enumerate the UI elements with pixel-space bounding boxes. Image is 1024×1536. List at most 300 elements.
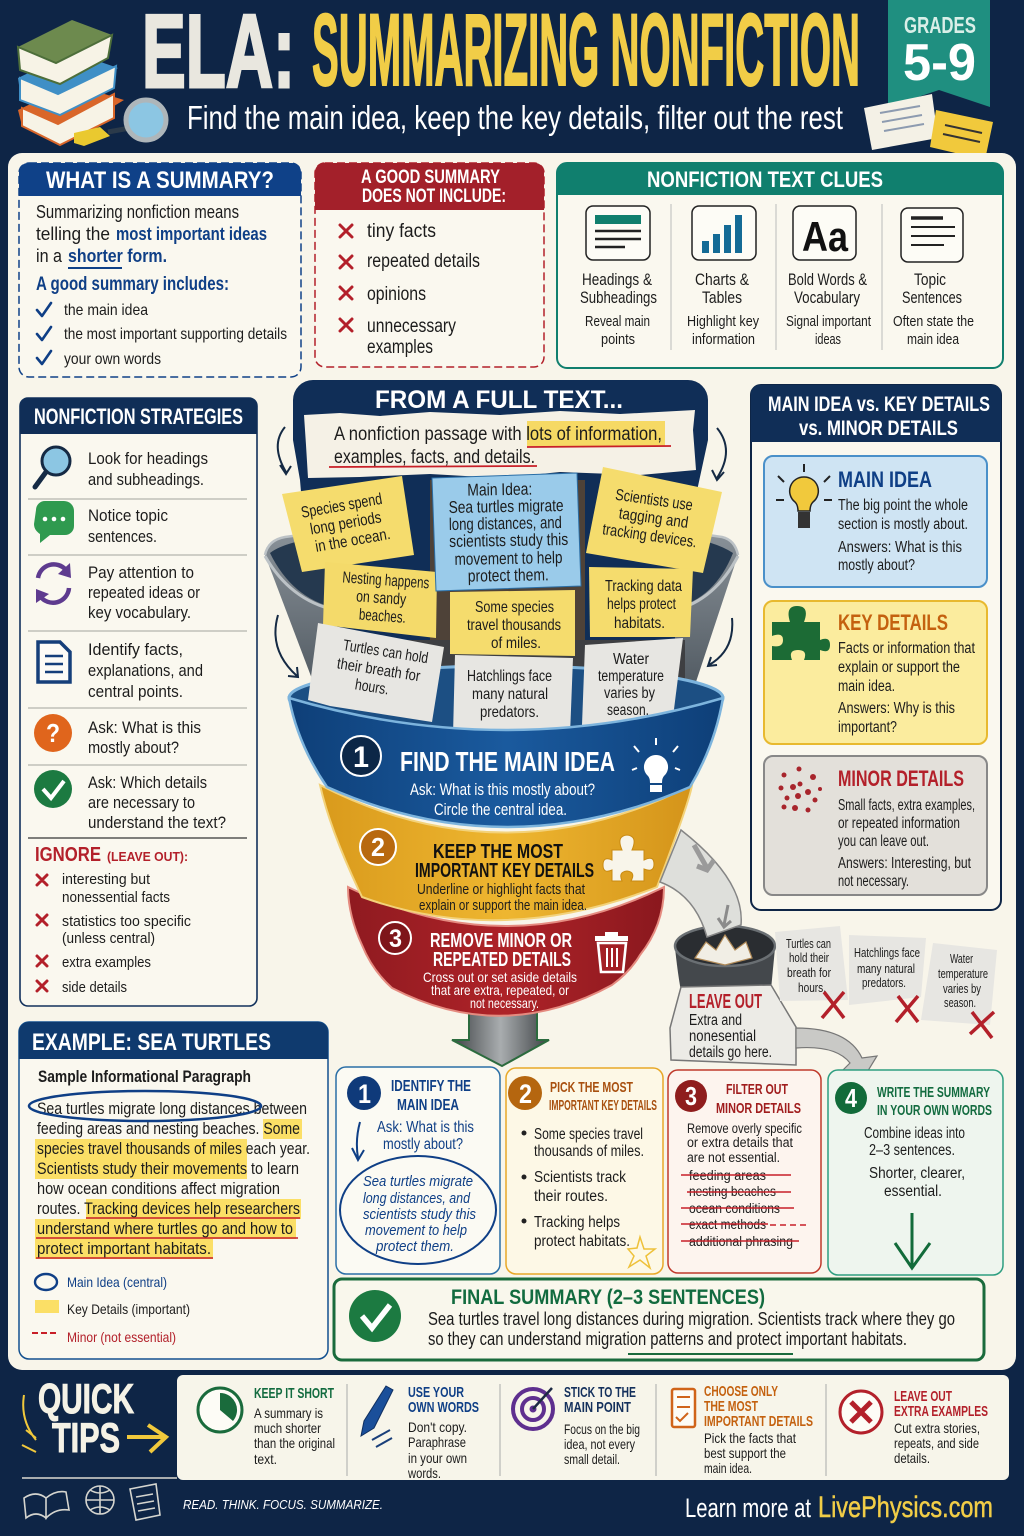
strategy: repeated ideas: [88, 563, 200, 622]
card: key details: explain or support the: [838, 659, 960, 676]
step 1 title: FIND THE MAIN IDEA: [400, 746, 615, 777]
ignore list: nonessential facts: [62, 889, 170, 906]
discarded note: water: temperature: [938, 966, 988, 981]
strategy: topic sentences: Notice topic: [88, 506, 168, 525]
paragraph text: Scientists study their movements to learn: [37, 1160, 299, 1178]
clue: topic sentences: main idea: [907, 331, 960, 348]
sticky note: scientists: tracking devices.: [601, 521, 698, 551]
legend: [32, 1274, 190, 1345]
clue: charts: [687, 270, 759, 348]
list of exclusions: examples: [367, 337, 433, 358]
tip: keep it short: KEEP IT SHORT: [254, 1385, 334, 1402]
step 3 title: REMOVE MINOR OR: [430, 930, 572, 952]
sticky note: main idea (blue): Sea turtles migrate: [448, 496, 564, 517]
card: key details: main idea.: [838, 678, 895, 695]
ignore heading: IGNORE: [35, 844, 101, 866]
gray note: hatchlings: [453, 655, 573, 735]
sticky note: some species: [450, 590, 575, 656]
icon: Aa: Aa: [802, 213, 849, 260]
definition text: shorter form.: [68, 246, 167, 266]
step card 1: identify the main idea: Ask: What is this: [377, 1119, 474, 1136]
discarded note: water: varies by: [943, 981, 981, 996]
definition text: in a: [36, 246, 63, 266]
step 1 description: Ask: What is this mostly about?: [410, 781, 595, 799]
step card 1: identify the main idea: Sea turtles migrate: [363, 1173, 473, 1190]
ignore heading: [35, 844, 188, 866]
clue: bold words: Bold Words &: [788, 270, 867, 289]
step card 2: pick key details: IMPORTANT KEY DETAILS: [549, 1097, 657, 1114]
icon: light bulb: [632, 738, 680, 792]
sticky note: some species: Some species: [475, 599, 554, 616]
discarded note: hatchlings: Hatchlings face: [854, 945, 920, 960]
main idea circle: [29, 1091, 261, 1121]
strategy: necessary details: [88, 773, 226, 832]
step card 3: filter out minor details: additional phrasing: [689, 1233, 793, 1249]
clue: headings: Subheadings: [580, 288, 657, 307]
strategy: repeated ideas: repeated ideas or: [88, 583, 200, 602]
tip: use your own words: Don't copy.: [408, 1419, 467, 1435]
clue: bold words: ideas: [815, 331, 841, 348]
tip: use your own words: words.: [407, 1465, 441, 1481]
card: main idea: section is mostly about.: [838, 516, 968, 533]
step card 1: identify the main idea: protect them.: [375, 1238, 454, 1255]
paragraph highlights: [35, 1119, 302, 1259]
sticky note: main idea (blue): movement to help: [454, 548, 563, 569]
step card 1: identify the main idea: mostly about?: [383, 1136, 463, 1153]
discarded note: hatchlings: predators.: [862, 975, 906, 990]
clue: charts: Tables: [702, 288, 742, 307]
sticky note: species spend: long periods: [309, 509, 383, 538]
step card 2: pick key details: thousands of miles.: [534, 1143, 644, 1160]
gray note: water temperature: [582, 638, 683, 725]
step 1 description: [410, 781, 595, 819]
icon: trash can: [595, 932, 628, 972]
tip: choose only important details: CHOOSE ONLY: [704, 1383, 778, 1400]
tip: use your own words: Paraphrase: [408, 1434, 466, 1450]
paragraph text: how ocean conditions affect migration: [37, 1180, 280, 1198]
funnel band 1: find the main idea: [289, 698, 723, 827]
card: minor details: Answers: Interesting, but: [838, 855, 972, 872]
footer icons: [24, 1484, 160, 1520]
list of exclusions: repeated details: [367, 251, 480, 272]
legend: Main Idea (central): [67, 1274, 167, 1290]
sticky note: tracking data: Tracking data: [605, 578, 682, 595]
gray note: turtles: [308, 623, 444, 722]
quick tips strip: [177, 1375, 1009, 1481]
final summary box: so they can understand migration patterns and protect important habitats.: [428, 1329, 907, 1349]
definition text: most important ideas: [116, 224, 267, 244]
strategy: repeated ideas: Pay attention to: [88, 563, 194, 582]
step card 2: pick key details: their routes.: [534, 1188, 608, 1205]
clue: topic sentences: Often state the: [893, 313, 974, 330]
step card 4: write the summary: Shorter, clearer,: [869, 1165, 965, 1182]
sticky note: scientists: Scientists use: [614, 487, 694, 514]
leave out label: LEAVE OUT: [689, 991, 762, 1013]
step card 3: filter out minor details: exact methods: [689, 1216, 766, 1232]
tip: leave out extra examples: LEAVE OUT: [894, 1388, 952, 1405]
learn more link text: Learn more at: [685, 1493, 811, 1523]
strategy: facts: explanations, and: [88, 661, 203, 680]
ignore heading: (LEAVE OUT):: [107, 849, 188, 864]
tip: choose only important details: best support the: [704, 1445, 786, 1461]
step card 1: identify the main idea: scientists study this: [363, 1206, 476, 1223]
sticky note: nesting: [323, 562, 437, 638]
step card 4: write the summary: 2–3 sentences.: [869, 1142, 955, 1159]
step 2 title: [415, 841, 594, 882]
step card 2: pick key details: protect habitats.: [534, 1233, 630, 1250]
arrows: falling notes: [275, 427, 732, 677]
ignore list: side details: [62, 979, 127, 996]
paragraph text: Sea turtles migrate long distances between: [37, 1100, 307, 1118]
step 3 title: REPEATED DETAILS: [433, 949, 571, 971]
sticky note: tracking data: habitats.: [614, 615, 665, 632]
step card 3: filter out minor details: [668, 1070, 821, 1273]
torn paper passage: examples, facts, and details.: [334, 447, 535, 468]
step card 2: pick key details: Scientists track: [534, 1169, 626, 1186]
discarded note: water: Water: [950, 951, 973, 966]
step card 4: write the summary: 4: [845, 1083, 857, 1113]
step card 1: identify the main idea: movement to help: [365, 1222, 467, 1239]
icon: repeat arrows: [36, 563, 71, 603]
list of exclusions: [340, 221, 480, 358]
clue: headings: points: [601, 331, 635, 348]
step card 3: filter out minor details: or extra details that: [687, 1135, 793, 1150]
step card 2: pick key details: 2: [519, 1079, 532, 1109]
card: minor details: not necessary.: [838, 873, 909, 890]
torn paper passage: A nonfiction passage with lots of information,: [334, 424, 662, 445]
strategy: topic sentences: sentences.: [88, 527, 157, 546]
card: key details: important?: [838, 719, 897, 736]
step card 1: identify the main idea: 1: [358, 1079, 371, 1109]
heading: [768, 393, 990, 440]
heading: vs. MINOR DETAILS: [799, 417, 958, 440]
discarded note: water: [921, 943, 997, 1038]
subheading: Sample Informational Paragraph: [38, 1067, 251, 1086]
ignore list: [37, 871, 191, 996]
icon: yellow bulb: [776, 464, 832, 528]
gray note: hatchlings: predators.: [480, 704, 539, 721]
step 1 number: [341, 736, 381, 776]
sticky note: main idea (blue): protect them.: [468, 565, 549, 586]
legend: Key Details (important): [67, 1301, 190, 1317]
header band: [18, 0, 993, 160]
strategy: facts: Identify facts,: [88, 640, 183, 659]
clue: bold words: Vocabulary: [794, 288, 860, 307]
definition text: telling the: [36, 224, 110, 244]
clue: bold words: [786, 270, 872, 348]
strategy: necessary details: Ask: Which details: [88, 773, 207, 792]
step card 4: write the summary: essential.: [884, 1183, 942, 1200]
paragraph text: [37, 1100, 310, 1258]
checklist: the main idea: [64, 302, 148, 319]
learn more link text: [685, 1491, 993, 1524]
step card 3: filter out minor details: MINOR DETAILS: [716, 1100, 801, 1117]
strategy: headings: Look for headings: [88, 449, 208, 468]
step 3 number: [379, 922, 411, 954]
final summary box: [334, 1279, 984, 1360]
strategy: topic sentences: [88, 506, 168, 546]
step card 3: filter out minor details: nesting beaches: [689, 1183, 776, 1199]
icon: bar chart: [692, 206, 756, 260]
step 2 description: explain or support the main idea.: [419, 898, 587, 914]
tip: leave out extra examples: repeats, and side: [894, 1435, 979, 1451]
icon: puzzle piece: [603, 835, 654, 881]
final summary box: FINAL SUMMARY (2–3 SENTENCES): [451, 1286, 765, 1309]
strategy: ask about: Ask: What is this: [88, 718, 201, 737]
tab: from a full text: [293, 380, 708, 660]
quick tips heading: TIPS: [52, 1414, 120, 1461]
panel: nonfiction strategies: [20, 398, 257, 1006]
step 3 description: not necessary.: [470, 995, 539, 1011]
tip: keep it short: A summary is: [254, 1405, 323, 1421]
tagline: READ. THINK. FOCUS. SUMMARIZE.: [183, 1497, 383, 1512]
icon: scattered dots: [778, 766, 822, 812]
ignore list: (unless central): [62, 930, 155, 947]
tip: stick to the main point: idea, not every: [564, 1436, 635, 1452]
heading: NONFICTION STRATEGIES: [34, 404, 243, 429]
tip: stick to the main point: MAIN POINT: [564, 1399, 631, 1416]
heading: from a full text: FROM A FULL TEXT...: [375, 386, 623, 414]
tip: use your own words: [361, 1384, 479, 1481]
gray note: water temperature: varies by: [604, 685, 655, 702]
step 3 title: [430, 930, 572, 971]
step card 3: filter out minor details: ocean conditions: [689, 1200, 780, 1216]
icon: headings: [586, 206, 650, 260]
footer: [24, 1484, 993, 1524]
list of exclusions: unnecessary: [367, 316, 456, 337]
tip: keep it short: text.: [254, 1451, 277, 1467]
gray note: turtles: hours.: [354, 676, 390, 699]
clue: bold words: Signal important: [786, 313, 872, 330]
discarded note: turtles: hold their: [789, 950, 829, 965]
sticky note: species spend: in the ocean.: [314, 526, 392, 556]
heading: [361, 167, 506, 207]
tip: choose only important details: [672, 1383, 813, 1476]
gray note: turtles: their breath for: [336, 655, 421, 685]
tip: keep it short: [198, 1385, 335, 1467]
card: minor details: MINOR DETAILS: [838, 766, 964, 791]
sticky note: scientists: [586, 467, 722, 573]
strategy: headings: and subheadings.: [88, 470, 204, 489]
definition text: Summarizing nonfiction means: [36, 202, 239, 222]
tip: choose only important details: THE MOST: [704, 1398, 758, 1415]
strategy: ask about: [88, 718, 201, 757]
sticky note: some species: travel thousands: [467, 617, 561, 634]
card: minor details: or repeated information: [838, 815, 960, 832]
clue: charts: Highlight key: [687, 313, 759, 330]
step card 4: write the summary: Combine ideas into: [864, 1125, 965, 1142]
step 2 description: [417, 882, 587, 914]
step 1 description: Circle the central idea.: [434, 801, 567, 819]
definition text: [36, 202, 267, 268]
grade ribbon: [888, 0, 990, 107]
blue funnel back rim: [289, 666, 723, 730]
icon: green puzzle: [772, 606, 830, 660]
heading: NONFICTION TEXT CLUES: [647, 167, 883, 192]
panel: example sea turtles: [19, 1022, 328, 1359]
discarded note: turtles: [775, 926, 848, 1018]
sticky note: main idea (blue): scientists study this: [449, 530, 568, 551]
heading: A GOOD SUMMARY: [361, 167, 500, 188]
clue: topic sentences: [893, 270, 974, 348]
tip: stick to the main point: small detail.: [564, 1451, 620, 1467]
clue: topic sentences: Sentences: [902, 288, 962, 307]
tip: use your own words: USE YOUR: [408, 1384, 464, 1401]
clue: charts: Charts &: [695, 270, 750, 289]
sticky note: species spend: [282, 476, 414, 572]
step card 3: filter out minor details: are not essential.: [687, 1150, 780, 1165]
icon: document: [38, 642, 70, 682]
tip: choose only important details: Pick the facts that: [704, 1430, 796, 1446]
subheading: A good summary includes:: [36, 274, 229, 295]
sticky note: tracking data: [589, 567, 693, 637]
step card 2: pick key details: Tracking helps: [534, 1214, 620, 1231]
quick tips heading: QUICK: [38, 1375, 134, 1422]
strategy: repeated ideas: key vocabulary.: [88, 603, 191, 622]
checklist: your own words: [64, 351, 161, 368]
sticky note: tracking data: helps protect: [607, 596, 676, 613]
leave out label: details go here.: [689, 1044, 772, 1061]
icon: speech bubble: [34, 501, 74, 543]
sticky note: some species: of miles.: [491, 635, 541, 652]
strategy: necessary details: are necessary to: [88, 793, 195, 812]
strategy: ask about: mostly about?: [88, 738, 179, 757]
funnel band 3: remove minor details: [348, 887, 664, 1016]
step 1 number: 1: [353, 741, 369, 774]
arrow to step 4: [796, 1028, 877, 1074]
card: main idea: [764, 456, 987, 587]
icon: check circle: [34, 770, 72, 808]
panel: what is a summary: [19, 163, 301, 377]
step card 2: pick key details: Some species travel: [534, 1126, 643, 1143]
step 3 description: [423, 969, 577, 1011]
icon: magnifier: [35, 447, 70, 487]
strategy: headings: [88, 449, 208, 489]
sticky note: species spend: Species spend: [300, 491, 384, 522]
list of exclusions: opinions: [367, 284, 426, 305]
tip: leave out extra examples: Cut extra stories,: [894, 1420, 980, 1436]
icon: notepad and sticky note: [864, 94, 993, 160]
tip: choose only important details: IMPORTANT DETAILS: [704, 1413, 813, 1430]
step card 1: identify the main idea: IDENTIFY THE: [391, 1078, 471, 1095]
leave out label: [670, 985, 796, 1065]
discarded note: turtles: Turtles can: [786, 936, 831, 951]
checklist: the most important supporting details: [64, 326, 287, 343]
panel: nonfiction text clues: [557, 163, 1003, 368]
leave out label: nonesential: [689, 1028, 756, 1045]
gray note: turtles: Turtles can hold: [342, 637, 429, 667]
step 2 number: 2: [371, 832, 385, 862]
panel: a good summary does not include: [315, 163, 544, 367]
leave out label: Extra and: [689, 1012, 742, 1029]
clue: headings: Headings &: [582, 270, 653, 289]
paragraph text: routes. Tracking devices help researchers: [37, 1200, 300, 1218]
heading: EXAMPLE: SEA TURTLES: [32, 1029, 271, 1056]
sticky note: main idea (blue): [432, 473, 581, 591]
gray note: water temperature: temperature: [598, 668, 664, 685]
step card 1: identify the main idea: [336, 1067, 500, 1274]
icon: question mark: [34, 714, 72, 752]
sticky note: main idea (blue): Main Idea:: [467, 480, 532, 500]
strategy: necessary details: understand the text?: [88, 813, 226, 832]
ignore list: statistics too specific: [62, 913, 191, 930]
legend: Minor (not essential): [67, 1329, 176, 1345]
card: main idea: Answers: What is this: [838, 539, 962, 556]
step card 3: filter out minor details: Remove overly specific: [687, 1121, 802, 1136]
strategy: facts: [88, 640, 203, 701]
step card 1: identify the main idea: long distances, and: [363, 1190, 471, 1207]
discarded note: hatchlings: many natural: [857, 961, 915, 976]
clue: topic sentences: Topic: [914, 270, 946, 289]
step 2 title: KEEP THE MOST: [433, 841, 563, 863]
checklist: [37, 302, 287, 368]
sticky note: nesting: beaches.: [358, 607, 406, 627]
strategy: facts: central points.: [88, 682, 183, 701]
funnel graphic: [265, 380, 738, 1066]
card: main idea: The big point the whole: [838, 497, 968, 514]
main cream panel: [8, 153, 1016, 1370]
sticky note: scientists: tagging and: [618, 505, 689, 532]
card: minor details: you can leave out.: [838, 833, 929, 850]
clue: headings: Reveal main: [585, 313, 650, 330]
flow: leave-out chute and bucket: [660, 830, 997, 1074]
chute band: [660, 830, 741, 937]
paragraph text: understand where turtles go and how to: [37, 1220, 293, 1238]
step 3 description: Cross out or set aside details: [423, 969, 577, 985]
step card 1: identify the main idea: MAIN IDEA: [397, 1097, 459, 1114]
step 2 description: Underline or highlight facts that: [417, 882, 585, 898]
panel: main idea vs key details vs minor details: [751, 385, 1001, 910]
step 2 title: IMPORTANT KEY DETAILS: [415, 860, 594, 882]
step card 3: filter out minor details: feeding areas: [689, 1167, 766, 1183]
paragraph text: feeding areas and nesting beaches. Some: [37, 1120, 300, 1138]
step card 2: pick key details: PICK THE MOST: [550, 1079, 633, 1096]
tip: leave out extra examples: [840, 1388, 988, 1466]
discarded note: turtles: hours.: [798, 980, 826, 995]
tip: keep it short: much shorter: [254, 1420, 321, 1436]
funnel spout arrow: [452, 1012, 549, 1066]
grade ribbon: GRADES: [904, 12, 976, 38]
tip: stick to the main point: Focus on the big: [564, 1421, 640, 1437]
card: key details: KEY DETAILS: [838, 610, 948, 635]
icon: stack of books with magnifier and highlighter: [18, 20, 166, 146]
sticky note: nesting: on sandy: [356, 588, 407, 609]
tip: stick to the main point: [513, 1384, 640, 1467]
icon: question mark: ?: [46, 718, 60, 748]
ignore list: extra examples: [62, 954, 151, 971]
step card 2: pick key details: [506, 1068, 663, 1274]
card: minor details: [764, 756, 987, 895]
paragraph text: species travel thousands of miles each year.: [37, 1140, 310, 1158]
bucket body: [675, 926, 775, 1000]
gray note: hatchlings: many natural: [472, 686, 548, 703]
tip: stick to the main point: STICK TO THE: [564, 1384, 636, 1401]
gray note: hatchlings: Hatchlings face: [467, 668, 552, 685]
sticky note: main idea (blue): long distances, and: [449, 513, 562, 534]
discarded note: hatchlings: [849, 935, 926, 1022]
discarded note: turtles: breath for: [787, 965, 832, 980]
sticky note: nesting: Nesting happens: [342, 569, 430, 592]
tip: keep it short: than the original: [254, 1435, 335, 1451]
grade ribbon: 5-9: [903, 34, 976, 92]
heading: DOES NOT INCLUDE:: [362, 186, 506, 207]
torn paper passage: [304, 410, 696, 478]
gray funnel bowl: [265, 480, 738, 710]
list of exclusions: tiny facts: [367, 221, 436, 242]
step card 3: filter out minor details: 3: [685, 1081, 697, 1111]
card: key details: [764, 601, 987, 744]
step 3 description: that are extra, repeated, or: [431, 982, 569, 998]
